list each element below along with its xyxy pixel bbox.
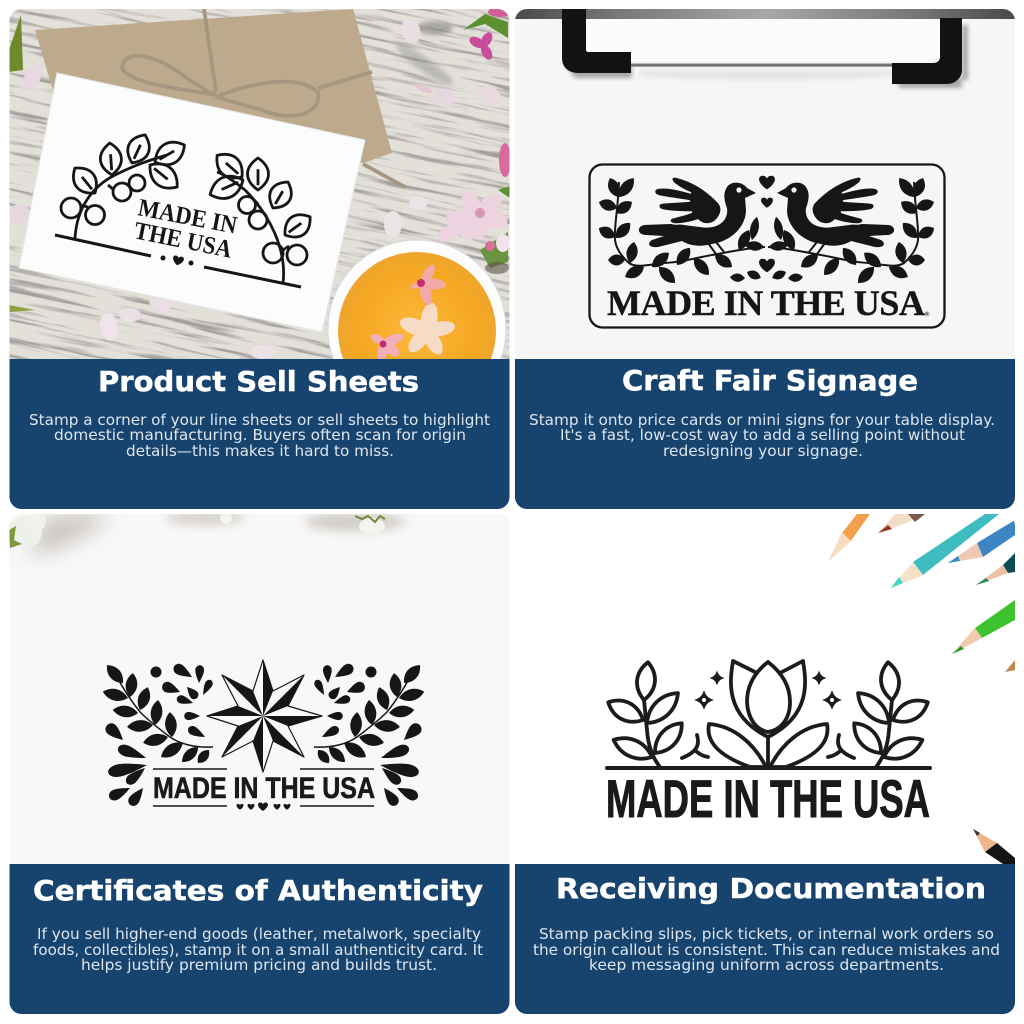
icon: tulip [731, 661, 805, 768]
stamp: two birds frame [590, 164, 944, 328]
body text [529, 411, 995, 460]
flower: pink blossom lower [370, 334, 404, 359]
panel: receiving documentation [515, 514, 1015, 1014]
photo: white wood with blossoms [10, 514, 424, 811]
panel: product sell sheets [10, 9, 510, 509]
body text: the origin callout is consistent. This can reduce mistakes and [533, 941, 1000, 959]
body text: Stamp a corner of your line sheets or sell sheets to highlight [29, 411, 490, 429]
stamp: berry arch with Made in the USA: THE USA [132, 217, 234, 264]
stamp: berry arch with Made in the USA: MADE IN [136, 194, 239, 240]
envelope [35, 9, 392, 163]
body text: redesigning your signage. [663, 442, 863, 460]
icon: pencils [828, 514, 1015, 864]
text band [515, 359, 1015, 509]
photo: envelope, card and tea on wood [10, 9, 510, 359]
body text: helps justify premium pricing and builds trust. [81, 956, 437, 974]
blossoms [435, 7, 512, 274]
white card [19, 73, 365, 332]
tea cup [328, 240, 506, 359]
heading: Receiving Documentation [556, 872, 986, 905]
body text: domestic manufacturing. Buyers often scan for origin [54, 426, 466, 444]
stamp: star and folk leaves: MADE IN THE USA [153, 772, 375, 805]
stamp: star and folk leaves [101, 660, 426, 811]
flower: pink blossom upper [409, 263, 446, 306]
body text: It's a fast, low-cost way to add a selling point without [560, 426, 965, 444]
panel: craft fair signage [515, 9, 1015, 509]
heading: Craft Fair Signage [622, 364, 918, 397]
panel: certificates of authenticity [8, 511, 510, 1014]
body text [29, 411, 490, 460]
body text: details—this makes it hard to miss. [126, 442, 394, 460]
stamp: two birds frame: ® [925, 311, 930, 318]
clip [562, 9, 962, 84]
body text: keep messaging uniform across departments. [589, 956, 944, 974]
body text: Stamp it onto price cards or mini signs for your table display. [529, 411, 995, 429]
twine bow [122, 9, 405, 187]
text band [10, 864, 510, 1014]
heading: Product Sell Sheets [98, 365, 419, 398]
body text: foods, collectibles), stamp it on a small authenticity card. It [33, 941, 483, 959]
stamp: berry arch with Made in the USA [55, 130, 316, 287]
text band [10, 359, 510, 509]
photo: clipboard [515, 9, 1015, 359]
body text [533, 925, 1000, 974]
body text [33, 925, 483, 974]
body text: If you sell higher-end goods (leather, metalwork, specialty [37, 925, 481, 943]
text band [515, 864, 1015, 1014]
heading: Certificates of Authenticity [33, 874, 483, 907]
stamp: two birds frame: MADE IN THE USA [607, 283, 925, 323]
photo: white page with coloured pencils [605, 514, 1015, 864]
body text: Stamp packing slips, pick tickets, or internal work orders so [539, 925, 994, 943]
stamp: tulip and sprigs [604, 661, 932, 829]
flower: pale blossom [400, 302, 456, 354]
icon: eight-point star [207, 660, 322, 772]
